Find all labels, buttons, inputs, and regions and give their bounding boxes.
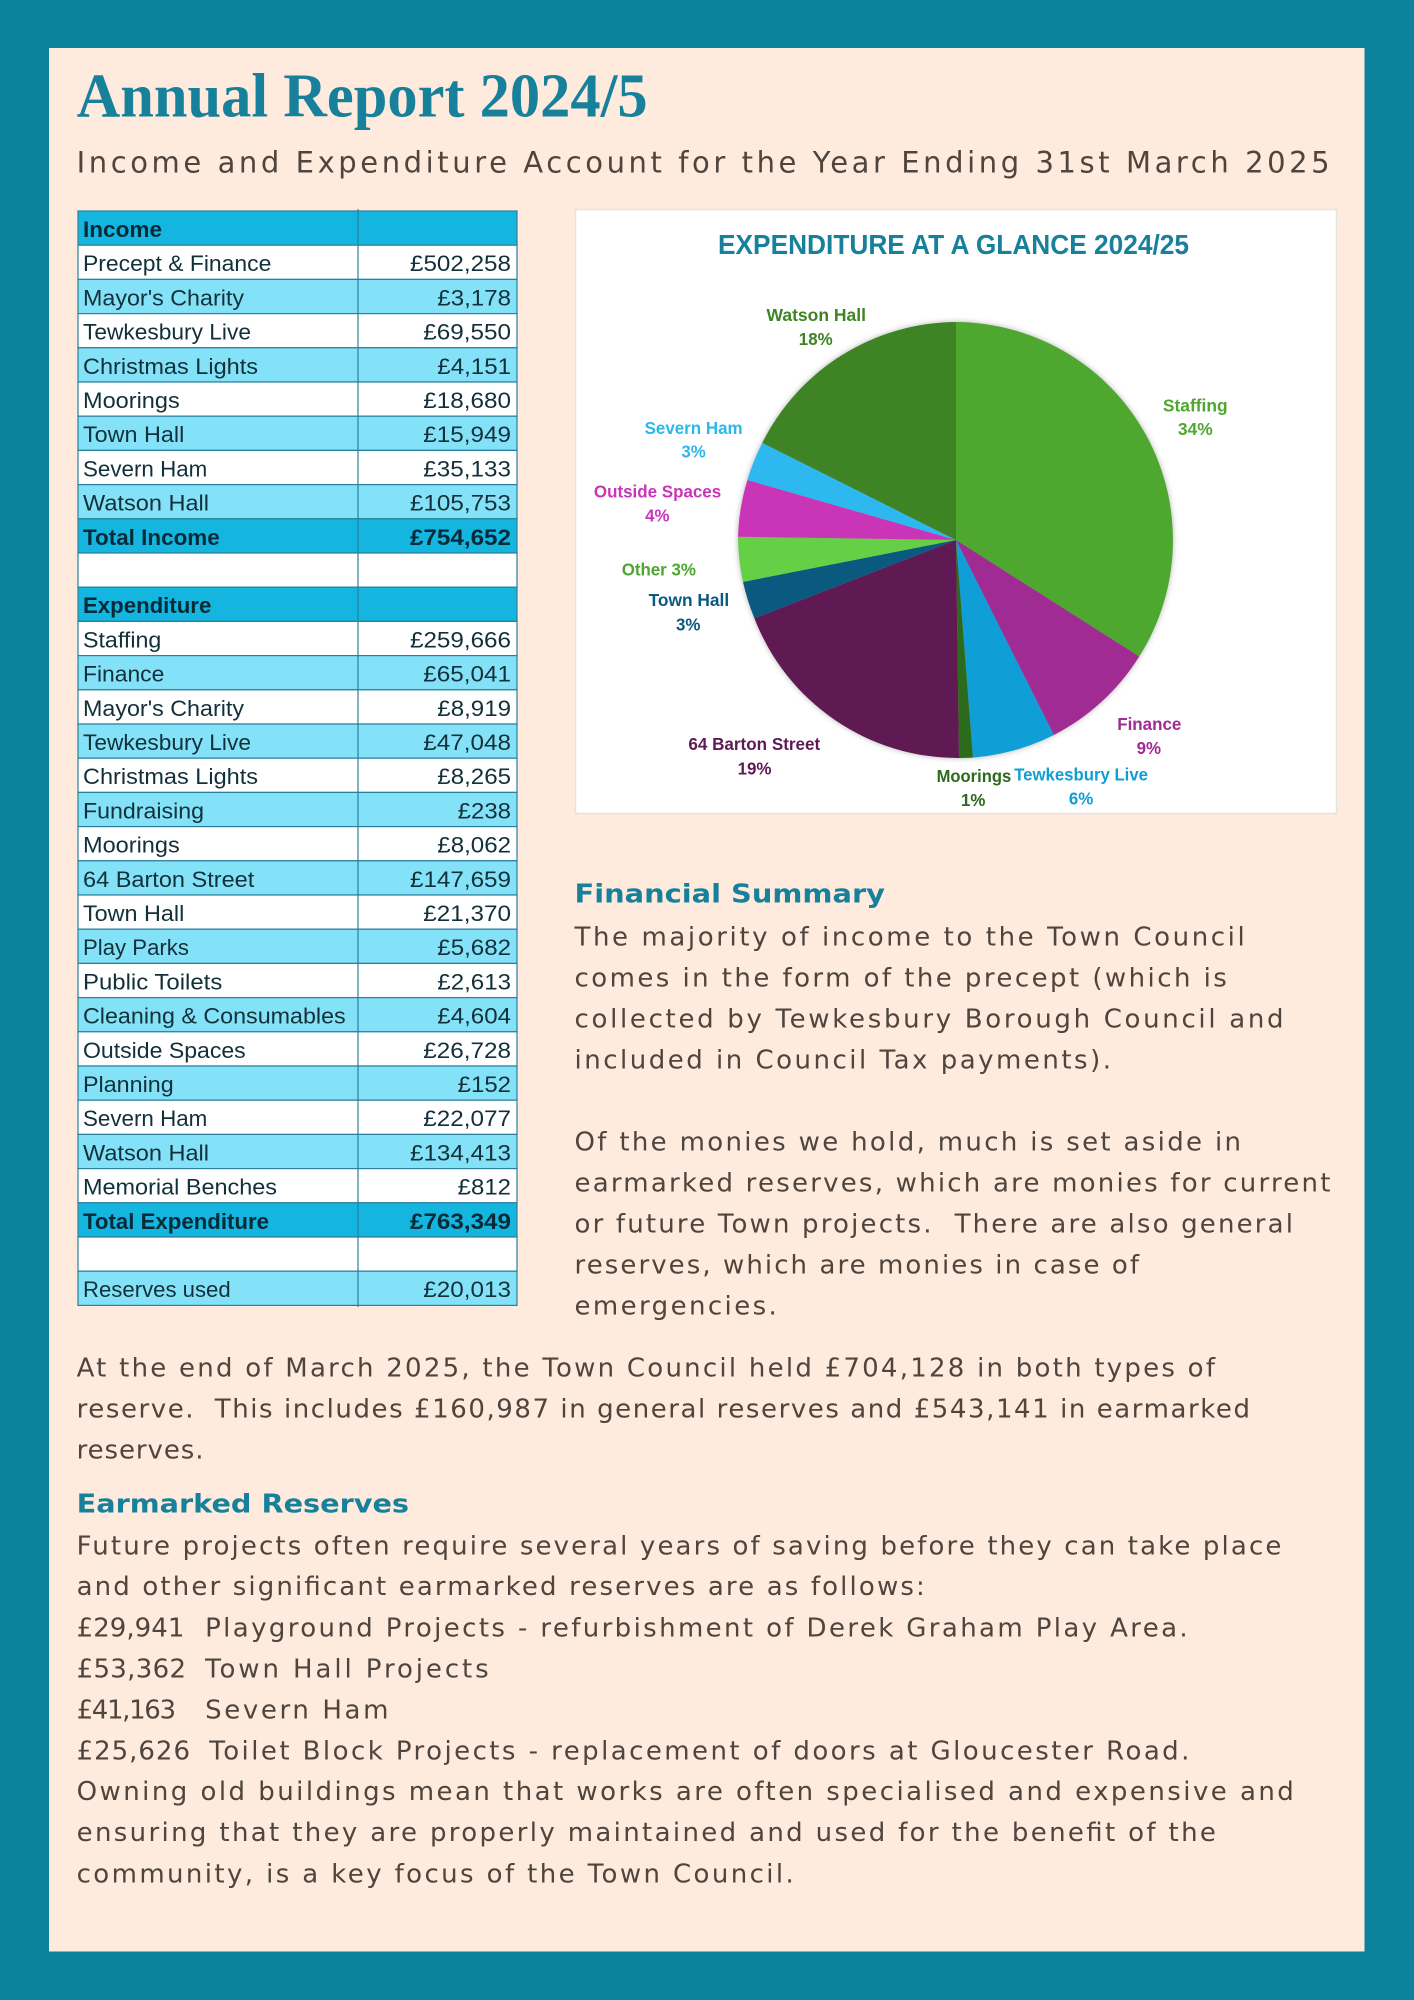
table row: Staffing bbox=[78, 621, 517, 656]
table row: Moorings income bbox=[78, 382, 517, 416]
reserve item: Town Hall Projects bbox=[77, 1655, 489, 1685]
table row: Town Hall income bbox=[78, 416, 517, 450]
text block: reserves held: At the end of March 2025, the Town Council held £704,128 in both types of bbox=[77, 1354, 1216, 1384]
table row: Mayor's Charity income bbox=[78, 279, 517, 314]
table row: Precept & Finance bbox=[78, 245, 517, 279]
table row: Tewkesbury Live expenditure: £47,048 bbox=[423, 730, 511, 755]
reserve item: Toilet Block Projects: Toilet Block Projects - replacement of doors at Gloucester Road. bbox=[208, 1736, 1189, 1766]
table row: Mayor's Charity expenditure bbox=[78, 690, 517, 724]
slice: Severn Ham 3% bbox=[747, 443, 956, 540]
slice: Town Hall 3% bbox=[743, 540, 956, 618]
text block: financial summary: Of the monies we hold, much is set aside in bbox=[574, 1128, 1241, 1158]
table row: Expenditure header bbox=[78, 587, 517, 621]
text block: financial summary bbox=[574, 923, 1330, 1321]
slice: Staffing 34% bbox=[956, 322, 1173, 656]
table row: Finance: £65,041 bbox=[423, 662, 511, 687]
table row: Moorings expenditure: £8,062 bbox=[437, 833, 511, 858]
table row: Watson Hall income: £105,753 bbox=[410, 491, 511, 516]
panel: expenditure pie chart bbox=[576, 210, 1336, 814]
table row: blank spacer bbox=[78, 553, 517, 587]
reserve item: Toilet Block Projects: £25,626 bbox=[77, 1736, 190, 1766]
table row: Watson Hall expenditure bbox=[78, 1134, 517, 1169]
table row: Town Hall income: Town Hall bbox=[83, 422, 184, 447]
table row: Fundraising: Fundraising bbox=[83, 798, 204, 823]
table row: Play Parks: Play Parks bbox=[83, 935, 189, 960]
text block: reserves held bbox=[77, 1354, 1250, 1465]
table row: Income header: Income bbox=[83, 217, 162, 242]
table row: Total Income: Total Income bbox=[83, 525, 220, 550]
table row: Planning: £152 bbox=[458, 1072, 511, 1097]
table row: Severn Ham income: Severn Ham bbox=[83, 456, 207, 481]
table row: Precept & Finance: Precept & Finance bbox=[83, 251, 271, 276]
table row: Fundraising: £238 bbox=[458, 798, 511, 823]
label: Severn Ham bbox=[645, 418, 743, 462]
table row: Memorial Benches bbox=[78, 1169, 517, 1203]
label: Staffing: Staffing bbox=[1163, 395, 1228, 415]
reserve item: Severn Ham: £41,163 bbox=[77, 1695, 176, 1725]
table row: Total Expenditure: £763,349 bbox=[410, 1209, 511, 1234]
slice: Finance 9% bbox=[956, 540, 1139, 735]
table row: Moorings expenditure: Moorings bbox=[83, 833, 180, 858]
text block: financial summary: emergencies. bbox=[574, 1291, 777, 1321]
table row: Total Expenditure bbox=[78, 1203, 517, 1237]
table row: Mayor's Charity expenditure: £8,919 bbox=[437, 696, 511, 721]
reserve item: Severn Ham: Severn Ham bbox=[205, 1695, 388, 1725]
text block: earmarked reserves bbox=[77, 1531, 1294, 1889]
subtitle: Income and Expenditure Account for the Year Ending 31st March 2025 bbox=[77, 145, 1330, 179]
table row: Total Expenditure: Total Expenditure bbox=[83, 1209, 269, 1234]
label: Watson Hall: 18% bbox=[799, 329, 833, 349]
reserve item: Severn Ham bbox=[77, 1695, 388, 1725]
text block: financial summary: earmarked reserves, which are monies for current bbox=[574, 1169, 1330, 1199]
table row: Cleaning & Consumables: Cleaning & Consumables bbox=[83, 1004, 346, 1029]
table row: Public Toilets: £2,613 bbox=[437, 969, 511, 994]
text block: earmarked reserves: Owning old buildings mean that works are often specialised and expensive and bbox=[77, 1777, 1294, 1807]
table row: Finance bbox=[78, 656, 517, 690]
text block: earmarked reserves: ensuring that they are properly maintained and used for the benefit of the bbox=[77, 1818, 1216, 1848]
slice: Other 3% bbox=[738, 537, 956, 582]
text block: financial summary: The majority of income to the Town Council bbox=[574, 923, 1245, 953]
label: Moorings: Moorings bbox=[937, 766, 1011, 786]
table row: Total Income: £754,652 bbox=[410, 525, 511, 550]
heading: Financial Summary: Financial Summary bbox=[574, 879, 885, 909]
label: 64 Barton Street bbox=[688, 734, 820, 778]
table row: Christmas Lights income bbox=[78, 348, 517, 382]
table row: Precept & Finance: £502,258 bbox=[410, 251, 511, 276]
table row: Christmas Lights expenditure bbox=[78, 758, 517, 792]
label: 64 Barton Street: 64 Barton Street bbox=[688, 734, 820, 754]
table row: Tewkesbury Live income: £69,550 bbox=[423, 320, 511, 345]
label: Finance: 9% bbox=[1137, 738, 1161, 758]
table row: Mayor's Charity income: Mayor's Charity bbox=[83, 285, 244, 310]
table row: Watson Hall expenditure: £134,413 bbox=[410, 1140, 511, 1165]
text block: reserves held: reserve. This includes £160,987 in general reserves and £543,141 in earmarked bbox=[77, 1395, 1250, 1425]
chart title: EXPENDITURE AT A GLANCE 2024/25 bbox=[718, 229, 1189, 260]
label: Tewkesbury Live: Tewkesbury Live bbox=[1014, 765, 1148, 785]
table row: Town Hall expenditure: £21,370 bbox=[423, 901, 511, 926]
table row: Reserves used bbox=[78, 1271, 517, 1305]
table row: Fundraising bbox=[78, 792, 517, 827]
label: Moorings bbox=[937, 766, 1011, 810]
table row: Tewkesbury Live expenditure: Tewkesbury Live bbox=[83, 730, 251, 755]
label: Outside Spaces: Outside Spaces bbox=[594, 481, 721, 501]
table row: Staffing: £259,666 bbox=[410, 627, 511, 652]
title: Annual Report 2024/5 bbox=[77, 63, 648, 131]
text block: financial summary: or future Town projects. There are also general bbox=[574, 1210, 1293, 1240]
label: Town Hall: Town Hall bbox=[649, 590, 729, 610]
table row: Planning: Planning bbox=[83, 1072, 174, 1097]
text block: earmarked reserves: community, is a key focus of the Town Council. bbox=[77, 1859, 794, 1889]
table row: Moorings expenditure bbox=[78, 827, 517, 861]
heading: Earmarked Reserves: Earmarked Reserves bbox=[77, 1489, 409, 1519]
table row: Reserves used: Reserves used bbox=[83, 1277, 231, 1302]
table row: Planning bbox=[78, 1066, 517, 1100]
table row: Reserves used: £20,013 bbox=[423, 1277, 511, 1302]
table row: Outside Spaces bbox=[78, 1032, 517, 1066]
text block: earmarked reserves: Future projects often require several years of saving before they can take place bbox=[77, 1531, 1281, 1561]
label: Finance: Finance bbox=[1117, 714, 1182, 734]
label: Staffing bbox=[1163, 395, 1228, 439]
text block: financial summary: included in Council Tax payments). bbox=[574, 1045, 1111, 1075]
label: Other: Other 3% bbox=[622, 560, 696, 580]
table row: blank spacer bbox=[78, 1237, 517, 1271]
label: Finance bbox=[1117, 714, 1182, 758]
table row: Public Toilets bbox=[78, 963, 517, 998]
table row: Town Hall income: £15,949 bbox=[423, 422, 511, 447]
text block: reserves held: reserves. bbox=[77, 1435, 204, 1465]
label: Severn Ham: 3% bbox=[681, 442, 706, 462]
label: Outside Spaces bbox=[594, 481, 721, 525]
label: Tewkesbury Live bbox=[1014, 765, 1148, 809]
table row: Mayor's Charity expenditure: Mayor's Charity bbox=[83, 696, 244, 721]
label: Tewkesbury Live: 6% bbox=[1069, 789, 1094, 809]
reserve item: Playground Projects: £29,941 bbox=[77, 1614, 184, 1644]
table row: Christmas Lights expenditure: £8,265 bbox=[437, 764, 511, 789]
label: Town Hall bbox=[649, 590, 729, 634]
table row: Town Hall expenditure: Town Hall bbox=[83, 901, 184, 926]
table row: Expenditure header: Expenditure bbox=[83, 593, 211, 618]
table row: Cleaning & Consumables: £4,604 bbox=[437, 1004, 511, 1029]
label: 64 Barton Street: 19% bbox=[738, 758, 772, 778]
table row: 64 Barton Street: £147,659 bbox=[410, 867, 511, 892]
label: Town Hall: 3% bbox=[676, 614, 701, 634]
table row: Severn Ham expenditure bbox=[78, 1100, 517, 1134]
slice: Tewkesbury Live 6% bbox=[956, 540, 1054, 758]
table row: Christmas Lights income: £4,151 bbox=[437, 354, 511, 379]
pie chart bbox=[738, 322, 1173, 758]
text block: financial summary: collected by Tewkesbury Borough Council and bbox=[574, 1004, 1284, 1034]
label: Watson Hall bbox=[766, 305, 866, 349]
table row: Christmas Lights expenditure: Christmas Lights bbox=[83, 764, 258, 789]
slice: Watson Hall 18% bbox=[762, 322, 956, 540]
table row: Moorings income: Moorings bbox=[83, 388, 180, 413]
table row: 64 Barton Street bbox=[78, 861, 517, 895]
table row: Severn Ham income: £35,133 bbox=[423, 456, 511, 481]
table row: Severn Ham income bbox=[78, 450, 517, 485]
table row: Tewkesbury Live income bbox=[78, 314, 517, 348]
table row: Finance: Finance bbox=[83, 662, 164, 687]
label: Severn Ham: Severn Ham bbox=[645, 418, 743, 438]
table row: Income header bbox=[78, 211, 517, 245]
slice: Outside Spaces 4% bbox=[738, 480, 956, 540]
label: Outside Spaces: 4% bbox=[645, 505, 670, 525]
text block: financial summary: comes in the form of the precept (which is bbox=[574, 964, 1227, 994]
table row: Watson Hall expenditure: Watson Hall bbox=[83, 1140, 209, 1165]
label: Watson Hall: Watson Hall bbox=[766, 305, 866, 325]
slice: Moorings 1% bbox=[956, 540, 973, 758]
label: Staffing: 34% bbox=[1178, 419, 1213, 439]
table row: Severn Ham expenditure: £22,077 bbox=[423, 1106, 511, 1131]
table row: Christmas Lights income: Christmas Lights bbox=[83, 354, 258, 379]
label: Moorings: 1% bbox=[961, 790, 986, 810]
reserve item: Playground Projects: Playground Projects - refurbishment of Derek Graham Play Area. bbox=[205, 1614, 1188, 1644]
table row: 64 Barton Street: 64 Barton Street bbox=[83, 867, 254, 892]
text block: earmarked reserves: and other significant earmarked reserves are as follows: bbox=[77, 1572, 925, 1602]
income and expenditure table bbox=[78, 209, 517, 1307]
table row: Tewkesbury Live expenditure bbox=[78, 724, 517, 758]
table row: Moorings income: £18,680 bbox=[423, 388, 511, 413]
table row: Watson Hall income bbox=[78, 485, 517, 519]
table row: Total Income bbox=[78, 519, 517, 553]
slice: 64 Barton Street 19% bbox=[754, 540, 959, 758]
reserve item: Town Hall Projects: Town Hall Projects bbox=[204, 1655, 489, 1685]
table row: Tewkesbury Live income: Tewkesbury Live bbox=[83, 320, 251, 345]
table row: Mayor's Charity income: £3,178 bbox=[437, 285, 511, 310]
table row: Memorial Benches: Memorial Benches bbox=[83, 1175, 277, 1200]
table row: Outside Spaces: Outside Spaces bbox=[83, 1038, 246, 1063]
table row: Town Hall expenditure bbox=[78, 895, 517, 929]
text block: financial summary: reserves, which are monies in case of bbox=[574, 1251, 1140, 1281]
table row: Cleaning & Consumables bbox=[78, 998, 517, 1032]
table row: Play Parks: £5,682 bbox=[437, 935, 511, 960]
table row: Staffing: Staffing bbox=[83, 627, 161, 652]
table row: Outside Spaces: £26,728 bbox=[423, 1038, 511, 1063]
table row: Severn Ham expenditure: Severn Ham bbox=[83, 1106, 207, 1131]
table row: Watson Hall income: Watson Hall bbox=[83, 491, 209, 516]
table row: Play Parks bbox=[78, 929, 517, 963]
table row: Memorial Benches: £812 bbox=[458, 1175, 511, 1200]
table row: Public Toilets: Public Toilets bbox=[83, 969, 222, 994]
reserve item: Town Hall Projects: £53,362 bbox=[77, 1655, 186, 1685]
